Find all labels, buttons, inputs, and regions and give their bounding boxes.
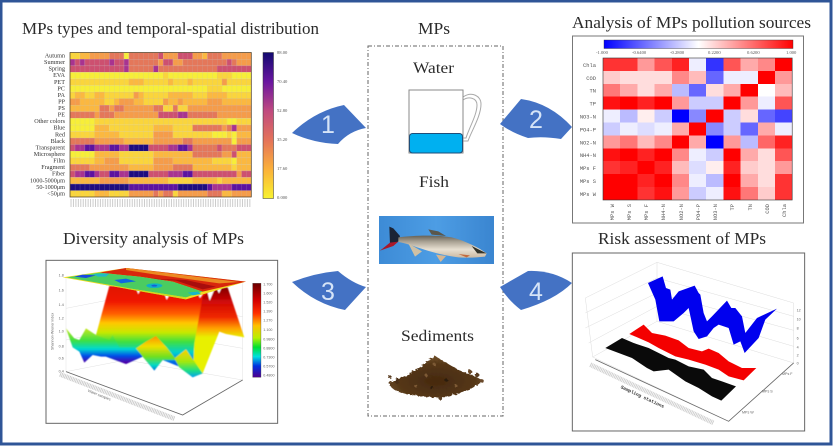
colour bar labels: 1.000 bbox=[786, 50, 797, 55]
colour bar labels bbox=[596, 50, 797, 55]
heatmap row labels: PE bbox=[58, 112, 65, 119]
spectrum labels: 1.390 bbox=[263, 310, 272, 314]
heatmap row labels: PS bbox=[58, 105, 66, 112]
heatmap row labels: PP bbox=[58, 98, 66, 106]
heatmap colour bar bbox=[263, 52, 274, 198]
value axis ticks: 0.4 bbox=[59, 369, 64, 373]
floor edge lines bbox=[66, 372, 243, 415]
heatmap row labels: PET bbox=[54, 79, 65, 86]
heatmap row labels: Fiber bbox=[52, 171, 65, 178]
value axis ticks: 0.8 bbox=[59, 344, 64, 348]
colour bar labels: 0.2200 bbox=[708, 50, 721, 55]
sample axis title: Water samples bbox=[87, 389, 111, 402]
heatmap site ticks bbox=[70, 199, 251, 207]
value axis ticks: 1.2 bbox=[59, 316, 64, 320]
matrix column labels: MPs S bbox=[627, 204, 633, 220]
colour bar labels: 88.00 bbox=[277, 50, 288, 55]
spectrum labels: 0.9800 bbox=[263, 337, 274, 341]
matrix column labels bbox=[610, 203, 788, 220]
matrix row labels: PO4-P bbox=[580, 128, 596, 134]
sample ticks bbox=[60, 374, 174, 419]
colour bar labels: 17.60 bbox=[277, 166, 288, 171]
depth axis labels: MPs W bbox=[742, 411, 754, 415]
sample ticks bbox=[590, 365, 714, 423]
colour bar labels: 0.6200 bbox=[747, 50, 760, 55]
risk axis ticks: 8 bbox=[797, 326, 799, 330]
axes walls bbox=[585, 262, 794, 421]
black series bbox=[605, 338, 736, 401]
image: sediment pile bbox=[388, 356, 484, 400]
spectrum labels: 1.270 bbox=[263, 319, 272, 323]
matrix column labels: NH4-N bbox=[661, 204, 667, 220]
risk axis ticks: 12 bbox=[797, 309, 801, 313]
spectrum colour bar bbox=[253, 283, 261, 377]
notches bbox=[136, 288, 221, 301]
image: fish bbox=[379, 216, 494, 264]
arrow 2 bbox=[500, 99, 572, 139]
matrix row labels: Chla bbox=[583, 63, 597, 69]
spectrum labels: 0.8800 bbox=[263, 346, 274, 350]
top plate bbox=[63, 268, 246, 299]
matrix row labels: TP bbox=[590, 102, 596, 108]
heading: risk: Risk assessment of MPs bbox=[598, 229, 766, 248]
matrix row labels: TN bbox=[590, 88, 596, 94]
spectrum labels: 0.7300 bbox=[263, 355, 274, 359]
heading: pollution sources: Analysis of MPs pollution sources bbox=[572, 13, 811, 32]
spectrum labels: 1.700 bbox=[263, 282, 272, 286]
heatmap row labels: Summer bbox=[44, 59, 65, 66]
arrow 3: 3 bbox=[321, 278, 335, 306]
sample axis label: Sampling stations bbox=[619, 384, 665, 410]
arrow 4 bbox=[500, 271, 572, 310]
value axis ticks: 1.6 bbox=[59, 288, 64, 292]
arrow 1 bbox=[292, 105, 366, 144]
matrix row labels: MPs W bbox=[580, 192, 597, 198]
matrix row labels: COD bbox=[586, 76, 596, 82]
panel: correlation matrix bbox=[572, 36, 804, 223]
heatmap cells bbox=[70, 52, 251, 197]
depth axis labels: MPs S bbox=[762, 389, 773, 393]
heatmap row labels: EVA bbox=[53, 72, 66, 79]
right peak bbox=[193, 287, 244, 375]
matrix row labels: NO3-N bbox=[580, 114, 596, 120]
matrix column labels: PO4-P bbox=[696, 204, 702, 220]
spectrum labels bbox=[263, 282, 274, 378]
colour bar labels: -1.000 bbox=[596, 50, 609, 55]
arrow 1: 1 bbox=[321, 111, 335, 139]
heatmap grid and border bbox=[70, 52, 251, 197]
panel: heatmap bbox=[30, 50, 288, 207]
colour bar labels: -0.6400 bbox=[632, 50, 647, 55]
heatmap row labels bbox=[30, 52, 66, 198]
panel frame bbox=[46, 260, 278, 423]
arrow 4: 4 bbox=[529, 278, 543, 306]
label: sediments: Sediments bbox=[401, 328, 474, 345]
front peaks bbox=[136, 336, 177, 371]
blue series bbox=[648, 276, 777, 353]
value axis ticks: 0.6 bbox=[59, 356, 64, 360]
axes walls bbox=[66, 268, 243, 415]
matrix row labels bbox=[580, 63, 597, 198]
matrix column labels: NO2-N bbox=[679, 204, 685, 220]
value axis ticks bbox=[59, 274, 64, 373]
spectrum labels: 1.600 bbox=[263, 291, 272, 295]
heading: types and distribution: MPs types and temporal-spatial distribution bbox=[22, 19, 319, 38]
heatmap row labels: Red bbox=[55, 131, 66, 138]
correlation colour bar bbox=[604, 40, 793, 48]
back wall bbox=[96, 286, 213, 377]
value axis ticks: 1.0 bbox=[59, 330, 64, 334]
matrix column labels: COD bbox=[765, 204, 771, 214]
label: water: Water bbox=[413, 60, 455, 77]
value axis ticks: 1.4 bbox=[59, 303, 64, 307]
left valley bbox=[66, 328, 143, 364]
matrix column labels: TP bbox=[730, 204, 736, 210]
colour bar labels: 70.40 bbox=[277, 79, 288, 84]
value axis ticks: 1.8 bbox=[59, 274, 64, 278]
heatmap row labels: Spring bbox=[48, 66, 65, 73]
spectrum labels: 0.4800 bbox=[263, 374, 274, 378]
panel: diversity 3D surface bbox=[46, 260, 278, 423]
heatmap row labels: Blue bbox=[53, 125, 65, 132]
colour bar labels: 0.000 bbox=[277, 195, 288, 200]
risk axis ticks: 2 bbox=[797, 354, 799, 358]
colour bar labels: -0.2800 bbox=[670, 50, 685, 55]
matrix cells bbox=[603, 58, 793, 200]
floor edge bbox=[595, 360, 794, 421]
red series bbox=[629, 325, 756, 380]
spectrum labels: 1.100 bbox=[263, 328, 272, 332]
value axis title: Shannon-Wiener index bbox=[50, 313, 54, 350]
matrix column labels: MPs W bbox=[610, 203, 616, 220]
heatmap row labels: 1000-5000μm bbox=[30, 177, 65, 184]
colour bar labels: 52.80 bbox=[277, 108, 288, 113]
panel frame bbox=[572, 253, 805, 431]
heatmap row labels: Microsphere bbox=[34, 151, 65, 158]
arrow 2: 2 bbox=[529, 106, 543, 134]
matrix border bbox=[603, 58, 792, 200]
panel frame bbox=[572, 36, 804, 223]
panel: MPs sample box bbox=[368, 46, 503, 416]
icon: cup of water bbox=[409, 90, 481, 153]
heatmap row labels: <50μm bbox=[47, 190, 65, 198]
heatmap row labels: 50-1000μm bbox=[36, 184, 65, 191]
heatmap row labels: Black bbox=[51, 138, 66, 145]
matrix row labels: NO2-N bbox=[580, 140, 596, 146]
arrow 3 bbox=[292, 271, 366, 310]
matrix column labels: NO3-N bbox=[713, 204, 719, 220]
panel: risk 3D ribbons bbox=[572, 253, 805, 431]
heatmap row labels: Transparent bbox=[36, 144, 65, 152]
spectrum labels: 1.520 bbox=[263, 300, 272, 304]
matrix row labels: MPs S bbox=[580, 179, 596, 185]
heatmap row labels: Other colors bbox=[34, 118, 66, 125]
matrix column labels: Chla bbox=[782, 203, 788, 217]
risk axis ticks: 4 bbox=[797, 346, 799, 350]
matrix row labels: MPs F bbox=[580, 166, 596, 172]
heatmap row labels: Autumn bbox=[45, 52, 65, 60]
risk axis ticks: 6 bbox=[797, 336, 799, 340]
heatmap row labels: PA bbox=[58, 92, 66, 99]
depth axis labels: MPs F bbox=[782, 372, 793, 376]
risk axis ticks bbox=[797, 309, 801, 365]
colour bar labels bbox=[277, 50, 288, 200]
heading: diversity: Diversity analysis of MPs bbox=[63, 229, 244, 248]
risk axis ticks: 0 bbox=[797, 361, 799, 365]
matrix row labels: NH4-N bbox=[580, 153, 596, 159]
heatmap row labels: Fragment bbox=[41, 164, 65, 171]
depth axis labels bbox=[742, 372, 793, 415]
matrix column labels: TN bbox=[748, 204, 754, 210]
heatmap row labels: PC bbox=[57, 85, 65, 92]
risk axis ticks: 10 bbox=[797, 317, 801, 321]
heading: MPs: MPs bbox=[418, 19, 450, 38]
label: fish: Fish bbox=[419, 174, 449, 191]
spectrum labels: 0.5700 bbox=[263, 364, 274, 368]
surface bbox=[66, 286, 244, 377]
matrix column labels: MPs F bbox=[644, 204, 650, 220]
colour bar labels: 35.20 bbox=[277, 137, 288, 142]
heatmap row labels: Film bbox=[53, 158, 65, 165]
